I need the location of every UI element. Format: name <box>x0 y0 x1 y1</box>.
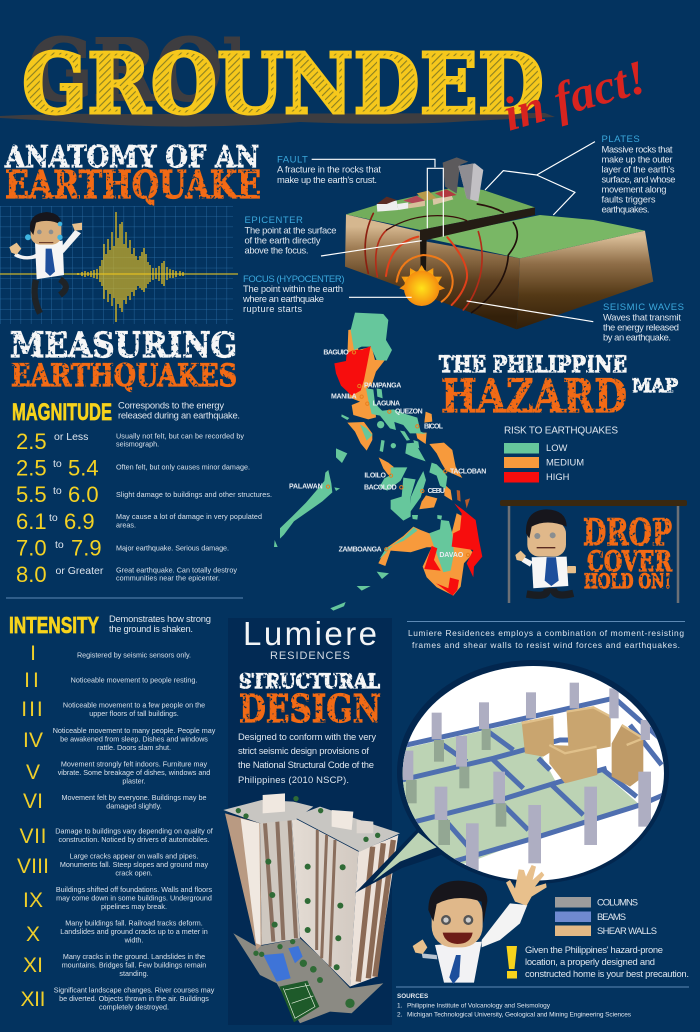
right soil face <box>517 231 653 329</box>
magnitude 5.5 to 6.0: to <box>53 485 62 497</box>
magnitude 8.0 or greater: communities near the epicenter. <box>116 574 220 583</box>
tie <box>545 557 559 586</box>
eyes <box>37 230 53 234</box>
intensity XI: standing. <box>119 969 149 978</box>
intensity VIII: Monuments fall. Steep slopes and ground may <box>60 860 209 869</box>
intensity VIII: Large cracks appear on walls and pipes. <box>70 851 198 860</box>
label: seismic waves <box>603 302 684 342</box>
magnitude 7.0 to 7.9: Major earthquake. Serious damage. <box>116 543 229 552</box>
left tower left face <box>225 813 262 950</box>
label: fault: FAULT <box>277 154 308 166</box>
intensity X: X <box>26 923 40 946</box>
sources: 2. <box>397 1012 403 1018</box>
medium swatch: MEDIUM <box>546 456 584 468</box>
label: focus: rupture starts <box>243 303 302 314</box>
magnitude 7.0 to 7.9: 7.9 <box>71 536 102 561</box>
intensity VIII: VIII <box>17 855 49 878</box>
city labels: LAGUNA <box>373 401 400 408</box>
structural description: Lumiere Residences employs a combination of moment-resisting <box>408 628 684 638</box>
hair <box>526 509 567 538</box>
intensity V: V <box>26 761 40 784</box>
city labels: BICOL <box>424 423 444 430</box>
label: plates: make up the outer <box>602 154 672 164</box>
smile <box>443 933 473 944</box>
columns swatch: COLUMNS <box>597 896 638 908</box>
intensity V: plaster. <box>122 776 146 785</box>
risk regions: low <box>274 313 454 611</box>
magnitude 6.1 to 6.9: areas. <box>116 520 136 529</box>
sources: Michigan Technological University, Geological and Mining Engineering Sciences <box>407 1012 632 1018</box>
left tower stripes <box>265 818 296 942</box>
panel background <box>228 618 392 1025</box>
heading: Anatomy of an Earthquake: EARTHQUAKE <box>5 162 261 207</box>
city labels: BAGUIO <box>323 349 349 356</box>
torso <box>435 942 482 983</box>
panel: Lumiere Residences <box>223 615 400 1025</box>
intensity XII: be diverted. Objects thrown in the air. Buildings <box>59 994 209 1003</box>
magnitude 6.1 to 6.9 <box>16 509 262 534</box>
map legend: RISK TO EARTHQUAKES <box>504 426 618 436</box>
risk regions: high <box>334 346 482 596</box>
intensity V: Movement strongly felt indoors. Furniture may <box>61 760 208 769</box>
grid background <box>0 206 233 324</box>
intensity VI: Movement felt by everyone. Buildings may be <box>61 793 207 802</box>
structural description <box>408 628 684 650</box>
heading: Anatomy of an Earthquake: ANATOMY OF AN <box>4 140 259 175</box>
city labels: ZAMBOANGA <box>339 546 382 553</box>
intensity IX: may come down in some buildings. Underground <box>56 893 212 902</box>
logo: RESIDENCES <box>270 650 350 662</box>
shear walls swatch: SHEAR WALLS <box>597 925 657 936</box>
callout lines <box>312 142 595 322</box>
fault shaft <box>420 240 427 270</box>
description <box>238 731 376 785</box>
earthquake block diagram <box>312 142 653 329</box>
heading: Anatomy of an Earthquake <box>4 140 261 207</box>
icon: waving man <box>413 865 547 984</box>
intensity III: upper floors of tall buildings. <box>89 709 179 718</box>
Philippine hazard map <box>274 313 486 611</box>
left arm and fist <box>422 953 437 959</box>
heading: Measuring Earthquakes <box>10 325 237 394</box>
intensity XI: mountains. Bridges fall. Few buildings remain <box>62 960 206 969</box>
label: focus: FOCUS (HYPOCENTER) <box>243 274 345 285</box>
city labels: QUEZON <box>395 408 423 415</box>
mouth <box>39 241 53 244</box>
basketball court <box>279 981 319 1022</box>
floor column reflections <box>406 728 506 845</box>
magnitude heading: MAGNITUDE <box>12 399 112 426</box>
intensity I: I <box>30 642 36 665</box>
title smear <box>0 113 555 127</box>
magnitude 2.5 or less: or Less <box>54 431 88 443</box>
intensity XII: Significant landscape changes. River courses may <box>54 985 215 994</box>
intensity heading: INTENSITY <box>9 612 99 638</box>
torso <box>35 241 64 279</box>
torso <box>532 557 568 588</box>
drop cover hold on slogan: COVER <box>587 545 673 578</box>
label: fault: A fracture in the rocks that <box>277 164 381 174</box>
tie <box>449 955 461 984</box>
intensity III: III <box>21 698 45 721</box>
magnitude 2.5 or less: 2.5 <box>16 429 47 454</box>
label: seismic waves: by an earthquake. <box>603 332 671 342</box>
magnitude 8.0 or greater: or Greater <box>56 565 104 577</box>
in fact script: in fact! <box>497 50 652 142</box>
intensity IX: IX <box>23 889 43 912</box>
magnitude 7.0 to 7.9: to <box>55 539 64 551</box>
low swatch: LOW <box>546 442 568 453</box>
intensity IV: IV <box>23 729 43 752</box>
magnitude heading: Corresponds to the energy <box>118 400 224 410</box>
city labels <box>289 349 486 559</box>
icon: crouching man <box>515 509 576 595</box>
risk regions: medium <box>347 328 473 596</box>
city labels: MANILA <box>331 394 357 401</box>
intensity XII: completely destroyed. <box>99 1002 169 1011</box>
rooftop boxes <box>263 793 285 813</box>
tall buildings <box>443 157 483 202</box>
intensity IV <box>23 726 216 752</box>
small eastern islets <box>457 490 470 508</box>
precaution note: Given the Philippines' hazard-prone <box>525 944 663 955</box>
magnitude 2.5 to 5.4 <box>16 456 250 481</box>
heading: Measuring Earthquakes: MEASURING <box>10 325 237 366</box>
structural legend <box>555 896 657 936</box>
precaution note: constructed home is your best precaution. <box>525 968 689 979</box>
label: fault: make up the earth's crust. <box>277 174 377 185</box>
beams swatch: BEAMS <box>597 911 626 922</box>
intensity VI: damaged slightly. <box>106 802 162 811</box>
right plate surface <box>427 215 645 258</box>
label: epicenter: EPICENTER <box>244 215 303 226</box>
hair <box>428 881 487 923</box>
city labels: DAVAO <box>439 552 464 559</box>
magnitude 5.5 to 6.0 <box>16 482 272 507</box>
eyes and mouth <box>534 532 556 548</box>
magnitude 5.5 to 6.0: 6.0 <box>68 482 99 507</box>
label: seismic waves: the energy released <box>603 322 679 332</box>
table legs <box>509 506 678 603</box>
city labels: BACOLOD <box>364 484 397 491</box>
sources <box>397 993 632 1018</box>
magnitude 6.1 to 6.9: May cause a lot of damage in very populated <box>116 512 262 521</box>
left fist <box>9 243 21 255</box>
label: focus: The point within the earth <box>243 283 343 294</box>
trees <box>236 796 380 1008</box>
right arm <box>62 230 81 253</box>
magnitude 2.5 to 5.4: 2.5 <box>16 456 47 481</box>
drop cover hold on slogan: HOLD ON! <box>584 569 671 593</box>
left arm <box>14 253 37 260</box>
city markers <box>326 351 470 557</box>
intensity XI <box>23 952 206 978</box>
intensity IV: rattle. Doors slam shut. <box>97 743 171 752</box>
intensity XII: XII <box>20 988 46 1011</box>
precaution note <box>525 944 689 979</box>
magnitude 2.5 to 5.4: Often felt, but only causes minor damage. <box>116 462 250 472</box>
description: Philippines (2010 NSCP). <box>238 774 349 785</box>
magnitude 2.5 to 5.4: 5.4 <box>68 456 99 481</box>
intensity X: Landslides and ground cracks up to a meter in <box>60 927 208 936</box>
city labels: TACLOBAN <box>450 468 486 475</box>
drop cover hold on table <box>500 500 687 603</box>
intensity IV: be awakened from sleep. Dishes and windows <box>60 734 208 743</box>
left plate surface <box>346 187 535 230</box>
intensity VIII <box>17 851 209 878</box>
left tower front face <box>260 817 300 945</box>
heading: Measuring Earthquakes: EARTHQUAKES <box>11 358 237 394</box>
floor slab <box>397 722 640 870</box>
intensity heading: Demonstrates how strong <box>109 613 211 624</box>
intensity V: vibrate. Some breakage of dishes, windows and <box>58 768 210 777</box>
label: plates: PLATES <box>602 134 640 145</box>
label: seismic waves: SEISMIC WAVES <box>603 302 684 313</box>
map legend <box>504 426 618 482</box>
intensity IX <box>23 885 213 912</box>
left roof <box>223 800 313 823</box>
right roof <box>293 807 400 852</box>
label: plates <box>602 134 676 214</box>
left soil face <box>345 214 520 329</box>
seismic waveform <box>78 212 183 322</box>
intensity V <box>26 760 210 785</box>
magnitude 2.5 to 5.4: to <box>53 458 62 470</box>
title shadow: GROUNDED <box>28 21 548 121</box>
city labels: ILOILO <box>364 473 387 480</box>
label: plates: faults triggers <box>602 194 656 204</box>
seismograph panel <box>0 206 238 324</box>
heading: The Philippine Hazard Map: THE PHILIPPINE <box>439 352 627 378</box>
seismic waves <box>365 204 517 313</box>
heading: The Philippine Hazard Map: MAP <box>632 375 678 397</box>
magnitude 2.5 or less: Usually not felt, but can be recorded by <box>116 431 244 440</box>
title: Grounded in fact <box>0 36 642 131</box>
tail interior <box>373 833 437 882</box>
focus starburst <box>399 265 445 306</box>
drop cover hold on slogan: DROP <box>583 512 672 554</box>
title word: GROUNDED <box>22 35 544 133</box>
magnitude 8.0 or greater: 8.0 <box>16 562 47 587</box>
intensity heading: the ground is shaken. <box>109 623 193 634</box>
magnitude 2.5 or less <box>16 429 244 454</box>
magnitude 7.0 to 7.9: 7.0 <box>16 536 47 561</box>
intensity I <box>30 642 191 665</box>
magnitude 8.0 or greater <box>16 562 237 587</box>
label: plates: surface, and whose <box>602 174 676 184</box>
fault wall <box>420 207 535 240</box>
intensity IX: pipelines may break. <box>101 902 167 911</box>
arm and fist left <box>522 557 533 567</box>
intensity XI: Many cracks in the ground. Landslides in the <box>63 952 205 961</box>
right fist <box>567 566 576 573</box>
intensity VI: VI <box>23 790 43 813</box>
sources: 1. <box>397 1002 403 1009</box>
magnitude heading <box>12 399 240 426</box>
table top <box>500 500 687 506</box>
shear walls <box>522 707 643 787</box>
magnitude 6.1 to 6.9: 6.1 <box>16 509 47 534</box>
label: epicenter <box>244 215 336 256</box>
right face <box>350 835 398 987</box>
building illustration <box>223 793 400 1023</box>
label: epicenter: above the focus. <box>244 244 308 256</box>
central wall <box>292 817 358 987</box>
label: epicenter: of the earth directly <box>244 234 321 246</box>
bubble interior <box>403 666 664 881</box>
tie <box>45 249 55 276</box>
sources: SOURCES <box>397 993 428 1000</box>
intensity III <box>21 698 205 721</box>
intensity VII: construction. Noticed by drivers of automobiles. <box>58 835 210 844</box>
description: Designed to conform with the very <box>238 731 376 742</box>
magnitude 7.0 to 7.9 <box>16 536 229 561</box>
intensity II: II <box>24 669 42 692</box>
head <box>31 217 61 245</box>
head <box>432 893 483 947</box>
intensity XI: XI <box>23 954 43 977</box>
intensity I: Registered by seismic sensors only. <box>77 651 191 660</box>
sweat drops <box>25 222 63 240</box>
structural description: frames and shear walls to resist wind forces and earthquakes. <box>412 640 680 650</box>
magnitude 8.0 or greater: Great earthquake. Can totally destroy <box>116 565 237 574</box>
city labels: PAMPANGA <box>364 383 401 390</box>
label: plates: earthquakes. <box>602 204 650 214</box>
intensity VIII: crack open. <box>115 869 153 878</box>
intensity II: Noticeable movement to people resting. <box>71 676 197 685</box>
magnitude 6.1 to 6.9: to <box>49 512 58 524</box>
intensity VI <box>23 790 207 813</box>
description: strict seismic design provisions of <box>238 745 369 756</box>
baseline trace <box>0 273 238 275</box>
magnitude 2.5 or less: seismograph. <box>116 440 159 449</box>
intensity II <box>24 669 197 692</box>
label: plates: movement along <box>602 184 666 194</box>
heading: Structural Design: DESIGN <box>239 686 381 731</box>
magnitude heading: released during an earthquake. <box>118 410 240 420</box>
magnitude 5.5 to 6.0: Slight damage to buildings and other structures. <box>116 490 272 499</box>
head <box>527 522 566 557</box>
site ground <box>233 933 383 1023</box>
right fist <box>72 223 82 231</box>
intensity IV: Noticeable movement to many people. People may <box>53 726 216 735</box>
magnitude 5.5 to 6.0: 5.5 <box>16 482 47 507</box>
label: focus: where an earthquake <box>242 293 324 304</box>
central stripes <box>317 830 335 967</box>
heading: Structural Design: STRUCTURAL <box>239 669 380 693</box>
intensity scale <box>17 642 216 1011</box>
label: epicenter: The point at the surface <box>244 224 336 236</box>
icon: exclamation mark <box>506 946 517 978</box>
intensity IX: Buildings shifted off foundations. Walls and floors <box>56 885 213 894</box>
columns <box>403 683 651 870</box>
structural drawing <box>373 666 664 882</box>
drop cover hold on slogan <box>583 512 673 593</box>
precaution note: location, a properly designed and <box>525 956 655 967</box>
description: the National Structural Code of the <box>238 759 374 770</box>
label: fault <box>277 154 381 185</box>
waving hand <box>506 865 547 906</box>
speech bubble: structural frame <box>355 660 669 893</box>
intensity X: width. <box>124 935 143 944</box>
magnitude 6.1 to 6.9: 6.9 <box>64 509 95 534</box>
intensity VII: VII <box>20 825 46 848</box>
pool <box>263 953 291 982</box>
label: focus <box>242 274 345 314</box>
intensity VII: Damage to buildings vary depending on quality of <box>55 827 213 836</box>
intensity X <box>26 919 208 946</box>
sources: Philippine Institute of Volcanology and Seismology <box>407 1002 551 1009</box>
magnitude scale <box>16 429 272 587</box>
intensity heading <box>9 612 211 638</box>
label: plates: layer of the earth's <box>602 164 675 174</box>
logo: Lumiere <box>243 615 377 652</box>
houses <box>377 189 457 212</box>
label: plates: Massive rocks that <box>602 144 673 154</box>
high swatch: HIGH <box>546 471 569 482</box>
heading: Structural Design <box>239 669 381 731</box>
raised arm <box>482 903 527 947</box>
city labels: CEBU <box>428 488 445 495</box>
intensity III: Noticeable movement to a few people on the <box>63 701 205 710</box>
intensity X: Many buildings fall. Railroad tracks deform. <box>65 919 203 928</box>
city labels: PALAWAN <box>289 484 323 491</box>
hair <box>30 212 61 235</box>
heading: The Philippine Hazard Map: HAZARD <box>441 369 627 423</box>
label: seismic waves: Waves that transmit <box>603 312 681 322</box>
legs <box>527 588 573 595</box>
beams <box>402 698 663 862</box>
legs <box>35 279 66 313</box>
intensity XII <box>20 985 215 1011</box>
icon: panicking man <box>9 212 82 313</box>
intensity VII <box>20 825 213 848</box>
eyes <box>441 915 473 925</box>
bubble outline and tail <box>355 660 669 893</box>
